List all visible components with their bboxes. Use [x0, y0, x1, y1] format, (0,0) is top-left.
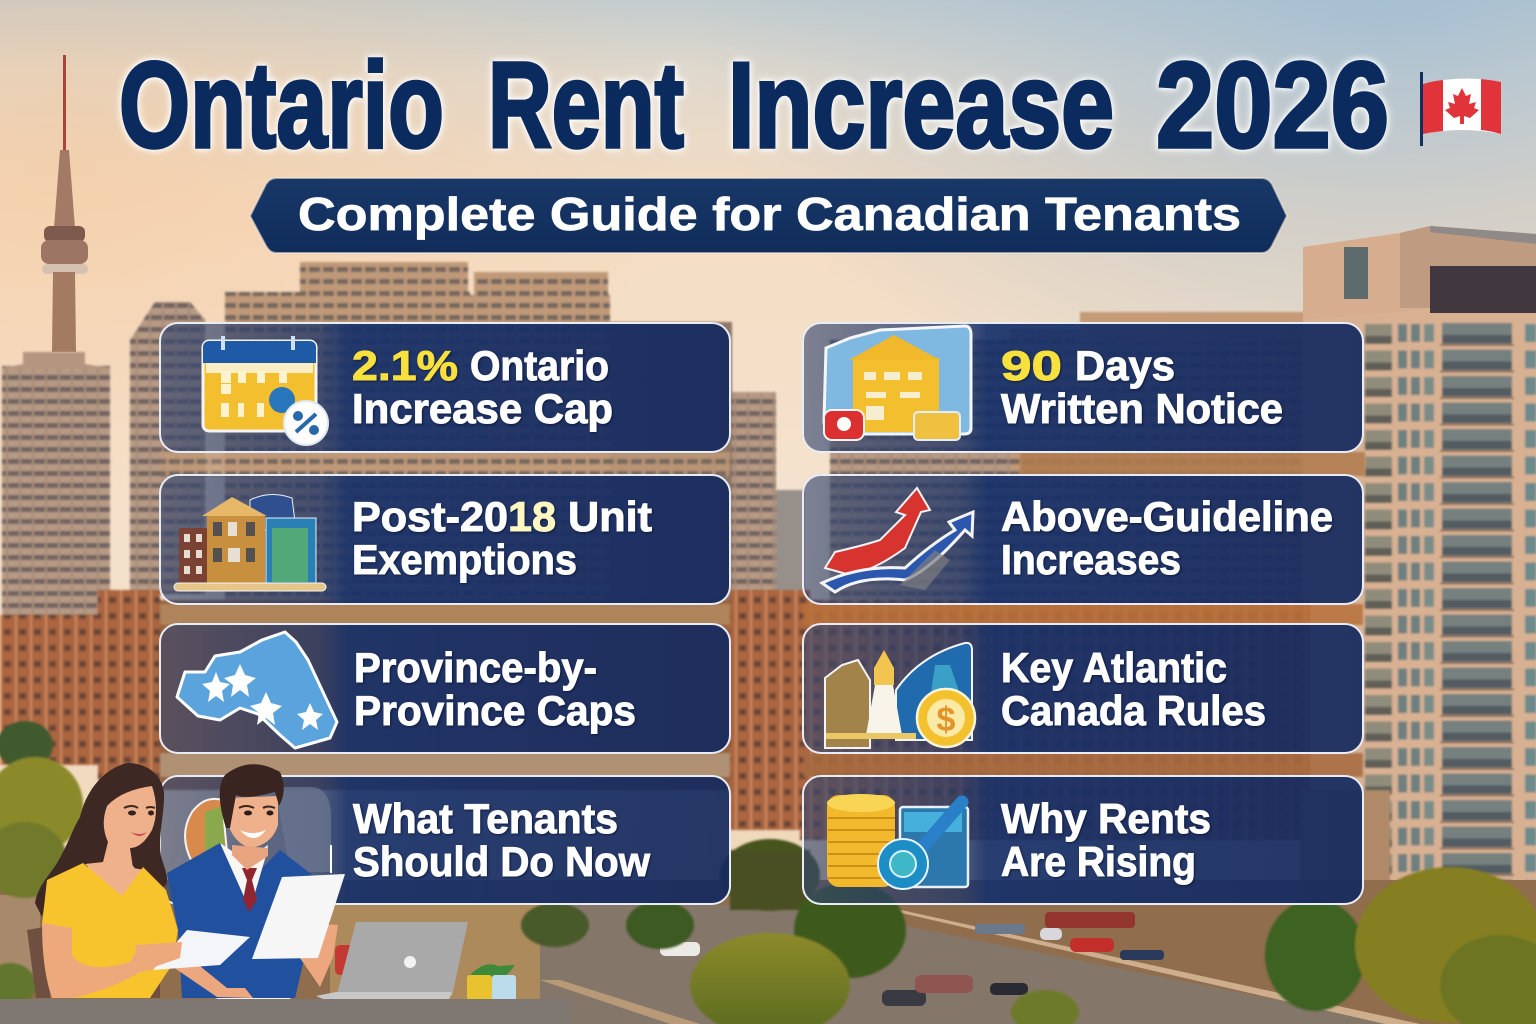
panel: Post-2018 unit exemptions: Exemptions	[352, 536, 577, 583]
panel: 2.1% Ontario increase cap: Ontario	[470, 342, 609, 389]
panel: above-guideline increases	[803, 475, 1363, 604]
panel: 2.1% Ontario increase cap: 2.1%	[352, 342, 458, 389]
panel: 90 days written notice: 90	[1001, 342, 1062, 389]
second tower and mid-rise row	[130, 262, 804, 615]
man	[167, 764, 338, 998]
panel: key Atlantic Canada rules: Key Atlantic	[1001, 644, 1227, 691]
panel: what tenants should do now: Should Do Now	[353, 838, 650, 885]
panel: 90 days written notice: Days	[1075, 342, 1175, 389]
icon: lighthouse, bottle and coin: $	[937, 701, 956, 739]
chair	[27, 926, 160, 998]
panel: above-guideline increases: Above-Guideline	[1001, 493, 1333, 540]
panel: 90 days written notice	[803, 323, 1363, 452]
icon: Canadian flag	[1420, 72, 1501, 146]
icon: rising red and blue arrows	[822, 488, 973, 592]
subtitle banner: Complete Guide for Canadian Tenants	[298, 188, 1241, 240]
ground and road	[0, 880, 1536, 1024]
icon: lighthouse, bottle and coin	[825, 643, 975, 748]
cars	[335, 912, 1164, 1006]
panel: why rents are rising: Are Rising	[1001, 838, 1196, 885]
panel: Post-2018 unit exemptions	[160, 475, 730, 604]
documents	[252, 874, 345, 959]
strips of building detail between cards	[160, 452, 1365, 777]
icon: yellow notice building	[824, 326, 971, 440]
woman	[35, 763, 182, 998]
panel: above-guideline increases: Increases	[1001, 536, 1181, 583]
right high-rise	[1303, 226, 1536, 890]
trees	[0, 721, 1536, 1024]
icon: apartment buildings	[174, 494, 326, 591]
panel: key Atlantic Canada rules: Canada Rules	[1001, 687, 1266, 734]
subtitle banner	[250, 178, 1287, 253]
icon: colourful badge behind people	[185, 787, 331, 873]
laptop	[316, 922, 468, 1002]
panel: what tenants should do now: What Tenants	[353, 795, 618, 842]
illustration: tenant couple at desk	[0, 763, 570, 1024]
panel: 2.1% Ontario increase cap	[160, 323, 730, 452]
panel: what tenants should do now	[160, 776, 730, 904]
panel: why rents are rising: Why Rents	[1001, 795, 1211, 842]
title: Ontario	[119, 37, 444, 173]
brick buildings	[0, 590, 1390, 890]
panel: 2.1% Ontario increase cap: Increase Cap	[352, 385, 613, 432]
title	[119, 37, 1389, 173]
title: 2026	[1156, 37, 1389, 173]
panel: key Atlantic Canada rules	[803, 624, 1363, 753]
icon: blue map of Canada with stars	[177, 632, 337, 748]
panel: province-by-province caps	[160, 624, 730, 753]
icon: calendar with percent badge	[203, 336, 328, 445]
cups and plant	[467, 964, 516, 1001]
desk	[0, 999, 570, 1024]
panel: province-by-province caps: Province Caps	[354, 687, 636, 734]
CN Tower	[41, 55, 88, 352]
panel: province-by-province caps: Province-by-	[354, 644, 597, 691]
panel: 90 days written notice: Written Notice	[1001, 385, 1283, 432]
icon: coins and magnifying glass	[827, 794, 968, 889]
title: Rent	[488, 37, 684, 173]
panel: Post-2018 unit exemptions: Post-2018 Unit	[352, 493, 652, 540]
left residential tower	[2, 352, 110, 622]
panel: why rents are rising	[803, 776, 1363, 904]
title: Increase	[728, 37, 1114, 173]
right mid buildings	[830, 312, 1305, 620]
